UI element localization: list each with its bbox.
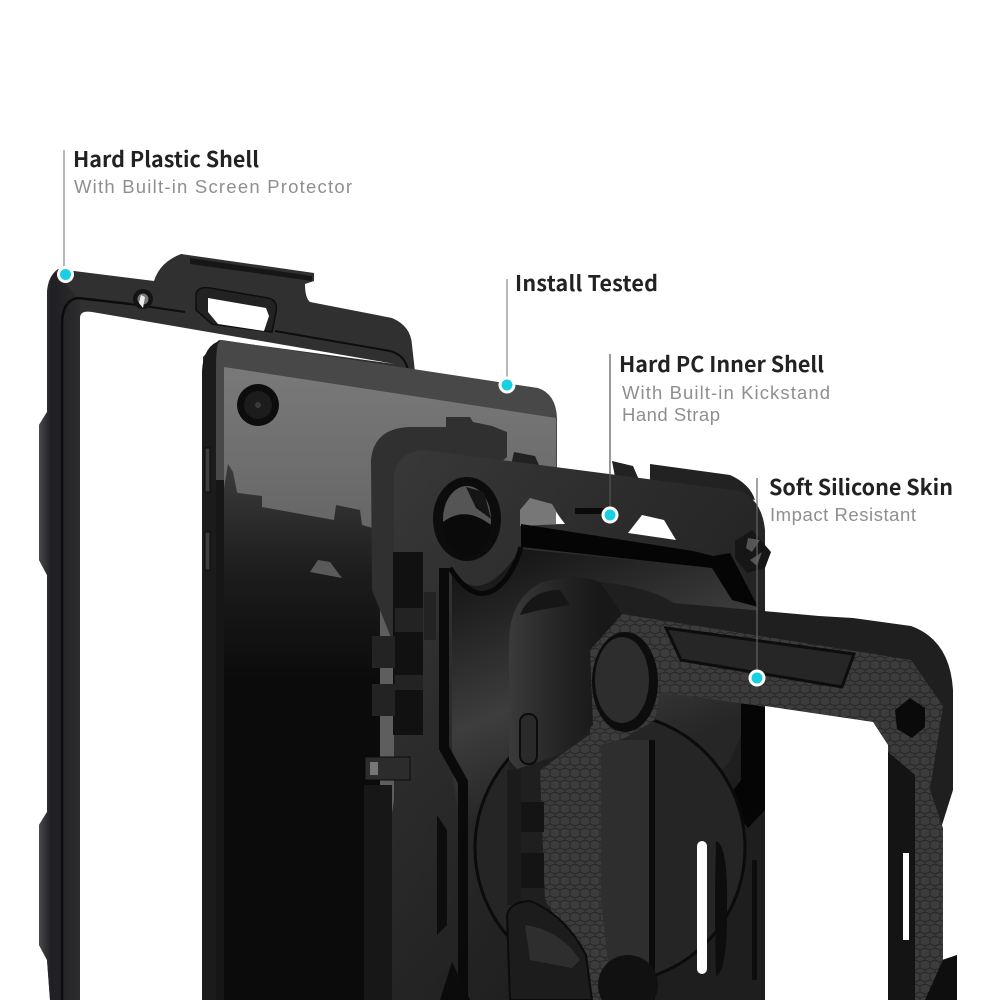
black window band	[521, 524, 758, 607]
callout: Hard PC Inner Shell: With Built-in Kickstand	[622, 382, 830, 403]
inner panel	[452, 549, 757, 900]
hex window right	[628, 515, 676, 540]
silicone skin	[507, 577, 957, 1000]
reflected window	[310, 560, 342, 578]
hex nut right	[735, 530, 771, 573]
callout: Soft Silicone Skin: Impact Resistant	[770, 504, 916, 525]
callout: Hard Plastic Shell: Hard Plastic Shell	[73, 143, 259, 174]
lower slot	[437, 815, 447, 935]
callout: Install Tested: Install Tested	[515, 267, 658, 298]
left strap column	[507, 770, 521, 905]
inner left ridge	[444, 568, 463, 1000]
device camera	[237, 384, 279, 426]
skin honeycomb top band	[575, 614, 943, 1000]
device side buttons	[205, 448, 210, 570]
bottom corner clip	[925, 955, 957, 1000]
top clips	[510, 452, 755, 500]
reflection silhouette	[224, 464, 380, 1000]
callout: Hard Plastic Shell: With Built-in Screen Protector	[74, 176, 352, 197]
hex window left	[520, 498, 564, 526]
callout: Hard Plastic Shell	[57, 143, 352, 283]
shell rim at top	[130, 304, 408, 370]
shell flap shading	[190, 258, 312, 281]
disc slots	[697, 841, 707, 974]
lower left chevrons	[440, 962, 470, 1000]
skin recess	[666, 628, 854, 687]
shell oblong window	[196, 288, 276, 332]
strap opening	[525, 925, 580, 968]
shell white gap over device	[80, 312, 395, 1000]
square loop	[365, 757, 410, 780]
inner PC shell	[364, 417, 771, 1000]
skin top frame	[509, 577, 957, 1000]
camera ring	[433, 477, 501, 561]
left hinge clips	[393, 552, 423, 735]
shell left strip	[39, 272, 80, 1000]
device side edge	[202, 340, 222, 1000]
skin left smooth side	[509, 577, 622, 769]
skin hex hole	[895, 698, 925, 738]
back flap	[371, 417, 507, 640]
skin side button	[520, 714, 537, 764]
strap slot	[575, 508, 605, 514]
callout: Install Tested	[498, 267, 658, 394]
callout: Soft Silicone Skin	[748, 471, 953, 686]
callout: Hard PC Inner Shell	[602, 348, 830, 524]
camera bulge recess	[450, 547, 521, 593]
right inner rail	[888, 752, 915, 1000]
shell screw hole	[133, 289, 153, 309]
left lower rail	[364, 785, 392, 1000]
callout: Soft Silicone Skin: Soft Silicone Skin	[769, 471, 953, 502]
side buttons	[521, 802, 544, 888]
black right slot	[733, 698, 765, 828]
lower device edge	[216, 480, 224, 1000]
device back panel	[224, 367, 556, 1000]
right slot	[903, 853, 909, 940]
lower strap	[507, 901, 592, 1000]
tablet device	[202, 340, 557, 1000]
shell inner ridge	[62, 298, 130, 1000]
callout: Hard PC Inner Shell: Hard PC Inner Shell	[619, 348, 824, 379]
white cut-out between layers	[765, 706, 888, 1000]
rotating disc	[475, 713, 757, 1000]
hard plastic shell frame	[39, 254, 415, 1000]
callout: Hard PC Inner Shell: Hand Strap	[622, 404, 720, 425]
skin lower left honeycomb	[540, 730, 612, 1000]
skin top ridge	[520, 590, 570, 615]
strap circle	[598, 955, 658, 1000]
skin camera hole	[592, 632, 658, 732]
shell body	[385, 450, 765, 1000]
